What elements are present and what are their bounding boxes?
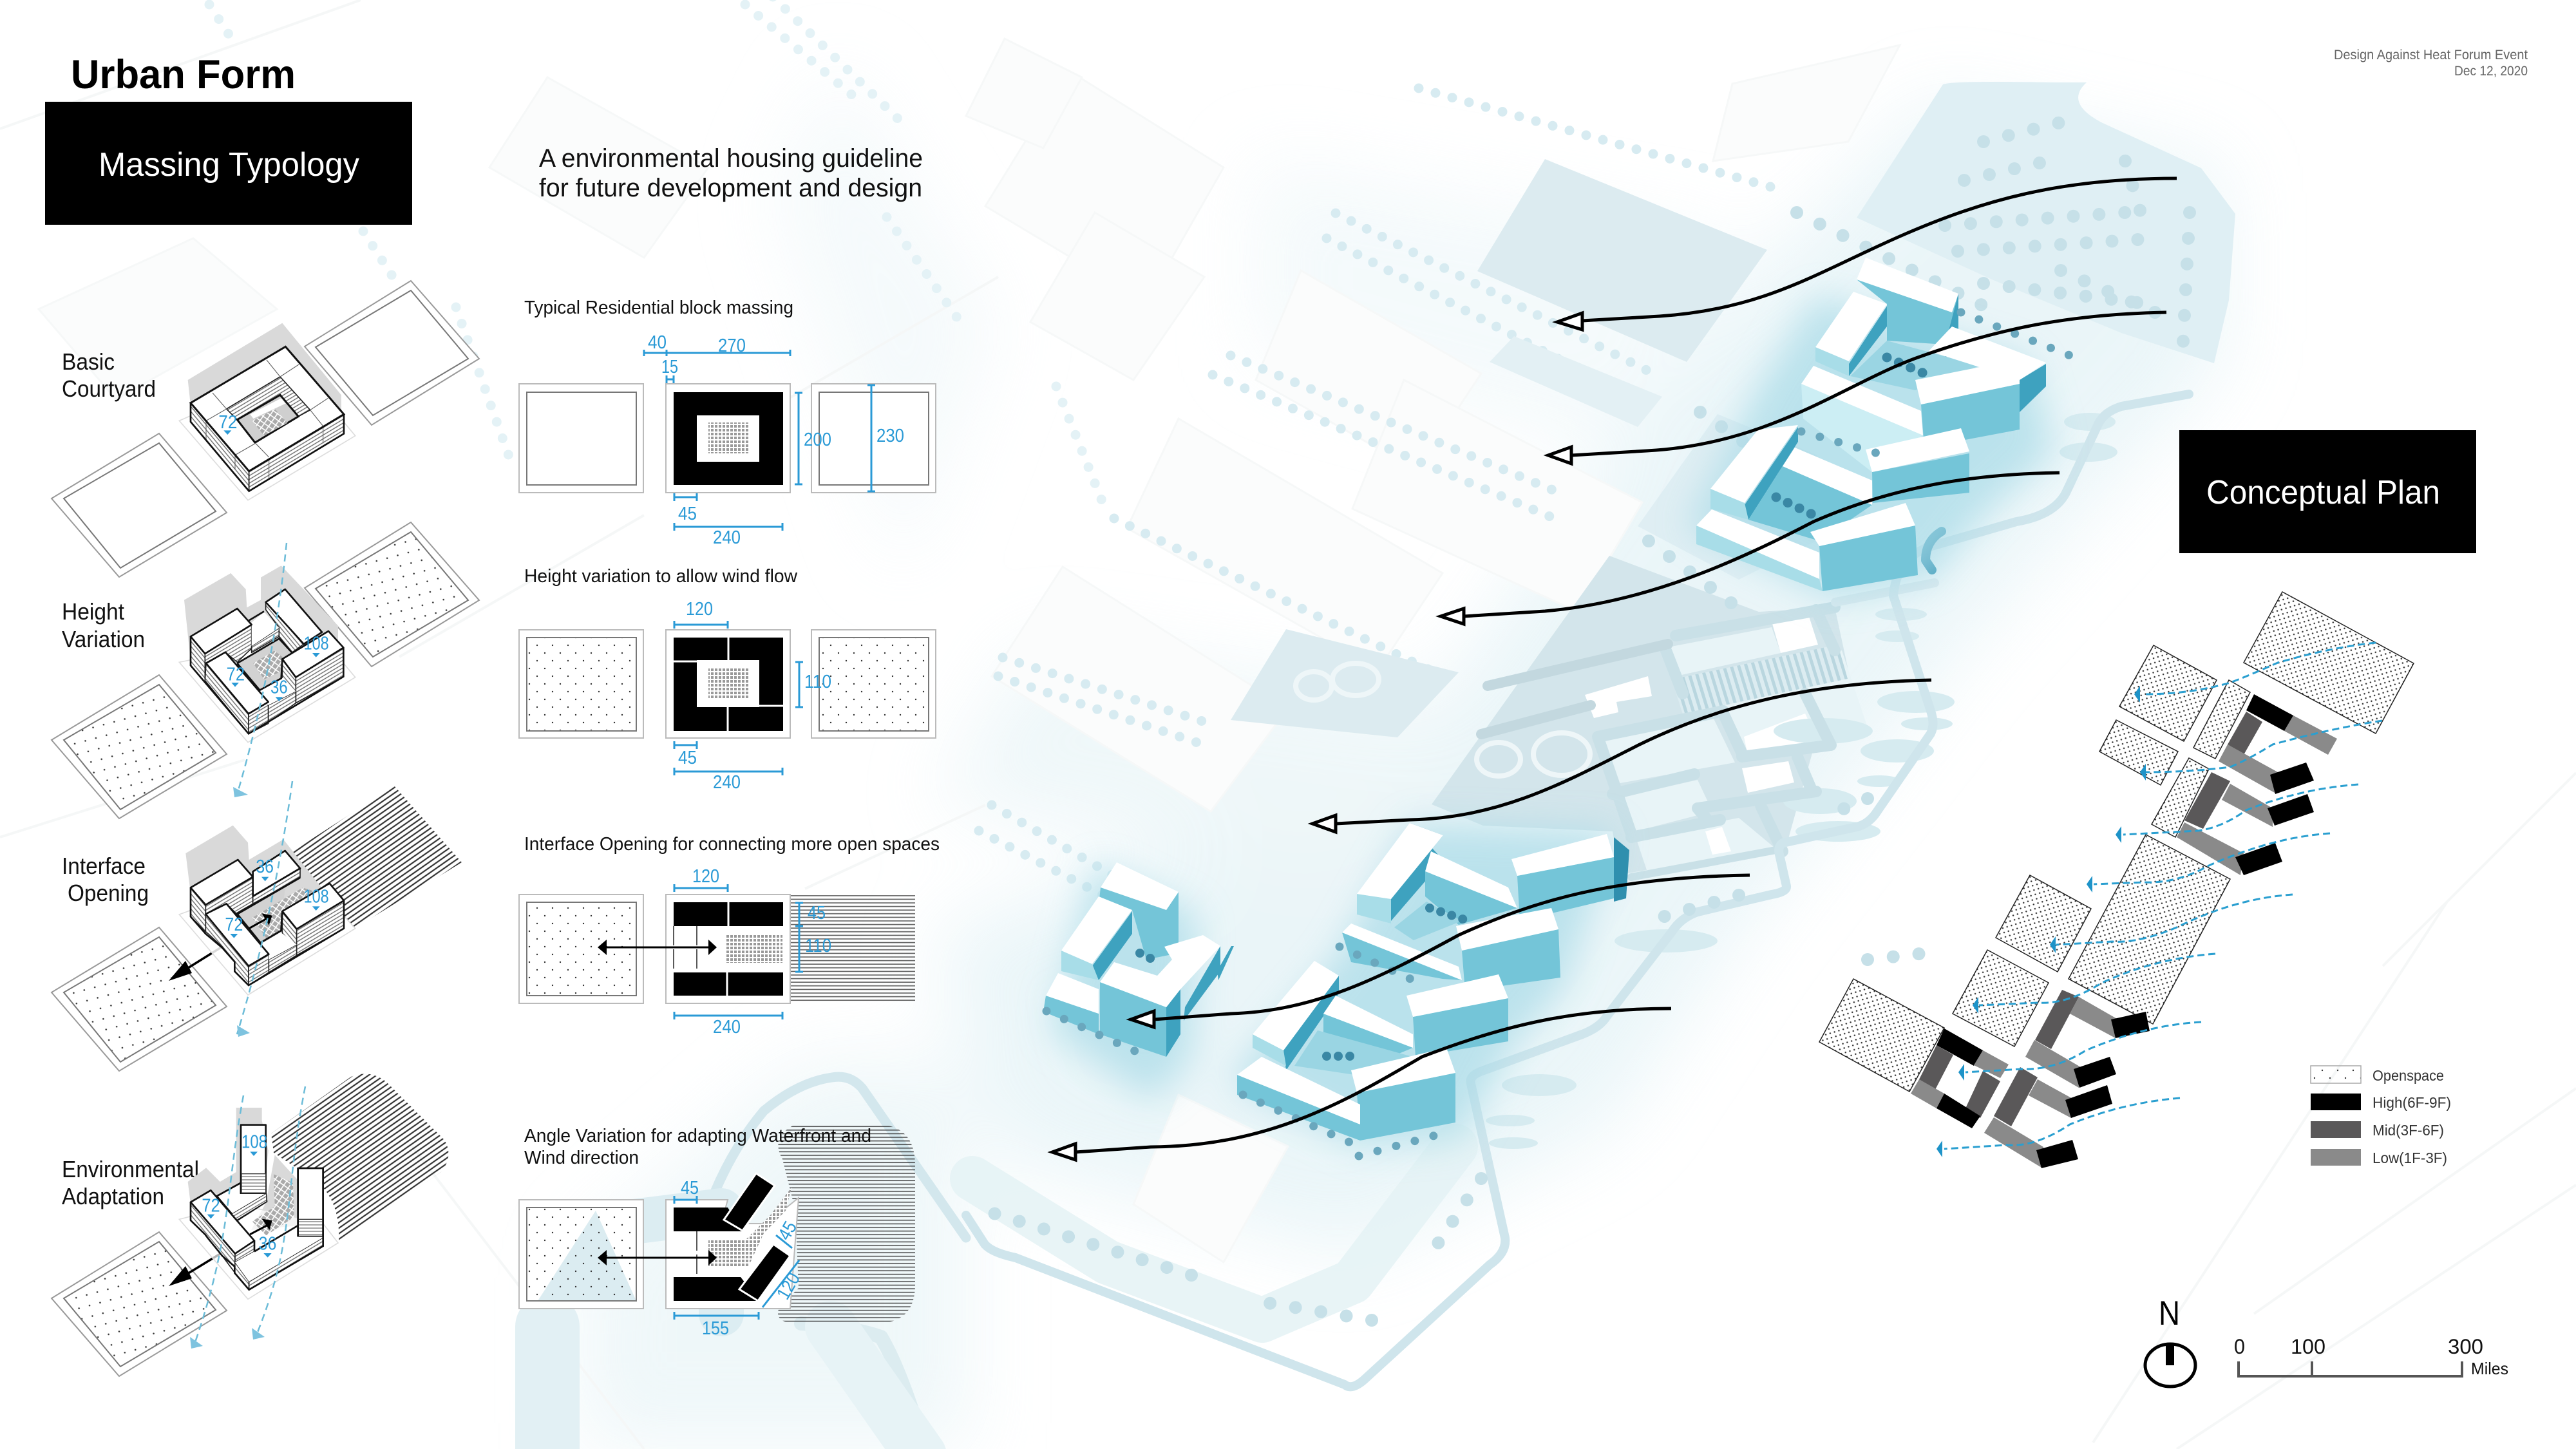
caption: Typical Residential block massing (524, 298, 793, 318)
outline (191, 1168, 323, 1290)
faint blocks (39, 39, 1900, 1262)
conceptual plan diagram (1819, 592, 2414, 1168)
panel: conceptual plan heading (2179, 430, 2476, 553)
dimensions: 45 (681, 1178, 699, 1198)
park: central site (1432, 556, 1850, 875)
map: parks and plazas (547, 82, 2235, 1449)
map: north building cluster (1696, 258, 2085, 591)
dimensions: 45 (808, 903, 826, 923)
dashed wind paths (1937, 643, 2382, 1157)
height labels: 72 (225, 914, 243, 935)
panel: massing typology heading (45, 102, 412, 225)
park: north waterfront (1857, 82, 2235, 363)
block (674, 638, 783, 731)
wind arrow 5 (1131, 875, 1750, 1027)
dimensions: 120 (773, 1269, 804, 1303)
panel: massing typology heading: Massing Typology (99, 146, 359, 184)
lower plot (52, 675, 227, 819)
map: south building clusters (1043, 823, 1629, 1156)
upper plot (305, 281, 479, 425)
water ellipses (1486, 413, 2117, 1149)
height labels (202, 1132, 276, 1258)
panel: conceptual plan heading: Conceptual Plan (2206, 474, 2440, 511)
plan row 2: height variation (519, 566, 936, 793)
height labels: 36 (259, 1234, 276, 1255)
base outline (179, 650, 355, 743)
round plazas (1296, 663, 1590, 776)
scale bar: Miles (2471, 1359, 2508, 1378)
roofs (269, 933, 297, 960)
dimensions (674, 1178, 804, 1339)
block (674, 902, 783, 996)
legend: mid: Mid(3F-6F) (2372, 1122, 2444, 1139)
caption: Wind direction (524, 1148, 639, 1168)
dimensions: 200 (804, 430, 831, 450)
height labels: 72 (227, 665, 245, 685)
walls (191, 403, 249, 491)
court outline (237, 611, 292, 690)
central site white pockets (1585, 614, 1818, 855)
base outline (179, 902, 355, 995)
arrow head in court (250, 1219, 272, 1235)
row 2: height variation (52, 522, 479, 819)
guideline text (539, 144, 923, 202)
park: strip (1490, 336, 1662, 427)
label: basic courtyard: Courtyard (62, 375, 156, 402)
shadow (188, 323, 341, 412)
caption: Interface Opening for connecting more open spaces (524, 834, 940, 855)
plan row 4: angle variation (519, 1124, 915, 1339)
south roofs (1046, 823, 1614, 1124)
title: Urban Form (71, 52, 296, 97)
base outline (179, 1204, 338, 1299)
legend (2311, 1066, 2451, 1166)
block (674, 1173, 791, 1301)
wind line (233, 543, 287, 797)
label: environmental adaptation: Adaptation (62, 1183, 164, 1209)
dimensions: 15 (661, 357, 678, 377)
row 1: basic courtyard (52, 281, 479, 577)
legend: openspace: Openspace (2372, 1067, 2444, 1084)
dimensions: 110 (805, 936, 831, 956)
height labels: 108 (242, 1132, 267, 1153)
wind arrow 4 (1312, 680, 1931, 832)
walls (191, 887, 205, 932)
dimensions: 45 (774, 1218, 801, 1244)
dimensions: 230 (876, 426, 904, 446)
dimensions: 240 (713, 1017, 741, 1037)
lower plot (52, 927, 227, 1071)
dimensions: 45 (678, 504, 697, 524)
wind arrow 2 (1548, 312, 2166, 464)
label: interface opening: Interface (62, 853, 146, 879)
plots (519, 1198, 799, 1309)
scale bar (2234, 1335, 2508, 1378)
base outline (179, 395, 355, 500)
tree rows (209, 0, 1779, 914)
court dots (252, 1174, 294, 1235)
label: height variation (62, 598, 145, 652)
event note (2334, 48, 2528, 79)
dimensions: 120 (692, 866, 719, 887)
lower park band (972, 1146, 1455, 1320)
caption (524, 1126, 871, 1168)
label: height variation: Variation (62, 626, 145, 652)
dimensions: 270 (718, 336, 746, 356)
hatch field (778, 1124, 915, 1323)
roof lines (206, 360, 328, 478)
height labels: 108 (304, 633, 329, 654)
guideline text: for future development and design (539, 174, 922, 202)
legend: openspace (2311, 1066, 2444, 1084)
waterfront route (966, 394, 2189, 1387)
legend: low: Low(1F-3F) (2372, 1150, 2447, 1166)
dimensions: 155 (702, 1318, 729, 1339)
connecting arrow (598, 940, 717, 955)
label: interface opening: Opening (68, 880, 149, 906)
courtyard block (179, 323, 355, 500)
plots (519, 895, 790, 1003)
lower plot (52, 433, 227, 577)
label: interface opening (62, 853, 149, 906)
height labels (227, 633, 329, 701)
park: round plaza (1231, 629, 1459, 737)
wind lines (190, 1086, 305, 1349)
wash: pale blue site glow (580, 64, 2222, 1449)
caption: Height variation to allow wind flow (524, 566, 798, 587)
shadow (184, 565, 338, 661)
site paths (1481, 583, 1935, 877)
shadow (188, 1108, 269, 1204)
varied height block (179, 565, 355, 743)
court floor (237, 886, 285, 943)
height labels: 108 (304, 887, 329, 907)
scale bar: 100 (2291, 1335, 2325, 1358)
lower plot (52, 1232, 227, 1376)
legend: high (2311, 1094, 2451, 1111)
caption: Angle Variation for adapting Waterfront and (524, 1126, 871, 1146)
legend: mid (2311, 1121, 2444, 1139)
block (674, 392, 783, 485)
dimensions (674, 599, 831, 793)
court floor (237, 639, 292, 690)
row 3: interface opening (52, 781, 462, 1071)
park and riverside trees (985, 122, 2190, 1320)
dimensions (674, 866, 831, 1037)
height labels: 72 (202, 1196, 220, 1217)
building bars (1911, 694, 2337, 1168)
wind arrow 3 (1441, 473, 2060, 624)
interface block (179, 826, 355, 995)
legend: low (2311, 1149, 2447, 1166)
height labels (225, 857, 329, 938)
arrow head in court (249, 913, 272, 929)
legend: high: High(6F-9F) (2372, 1094, 2451, 1111)
panel: plan diagrams (519, 298, 940, 1339)
arrow tail (169, 1253, 222, 1286)
plan row 3: interface opening (519, 834, 940, 1037)
south-west greenway (547, 1077, 966, 1449)
park behind north cluster (1638, 414, 1868, 580)
dimensions: 240 (713, 527, 741, 548)
wind arrow 1 (1557, 178, 2177, 330)
wind line (237, 781, 292, 1037)
striped terrace (1672, 645, 1848, 714)
height label 72: 72 (218, 412, 237, 433)
adaptation block (179, 1108, 338, 1299)
dark courtyard and street trees (1046, 908, 1468, 1156)
open space plots (1819, 592, 2414, 1092)
plots (519, 630, 936, 738)
court floor (237, 395, 298, 442)
walls (191, 1202, 235, 1273)
map: teal glow around clusters (1050, 296, 2054, 1146)
inner walls (227, 377, 310, 420)
hatch field (271, 1074, 448, 1242)
connecting arrow (598, 1250, 717, 1265)
dark route segment (1926, 531, 1942, 570)
roofs (217, 1183, 267, 1220)
north arrow: N (2159, 1294, 2180, 1332)
upper plot (305, 522, 479, 667)
row 4: environmental adaptation (52, 1074, 448, 1376)
dimensions: 45 (678, 748, 697, 768)
event note: Dec 12, 2020 (2454, 64, 2528, 79)
label: basic courtyard (62, 348, 156, 402)
roofs (252, 612, 279, 646)
label: height variation: Height (62, 598, 124, 625)
arrow tail (169, 947, 222, 981)
height labels: 36 (270, 677, 288, 698)
outline (191, 346, 344, 471)
label: environmental adaptation: Environmental (62, 1156, 199, 1182)
court outline (237, 878, 300, 943)
park: upper plaza (1477, 159, 1767, 362)
dimensions: 240 (713, 772, 741, 793)
courtyard trees (1776, 312, 2085, 518)
guideline text: A environmental housing guideline (539, 144, 923, 173)
scale bar: 300 (2448, 1335, 2483, 1358)
scale bar: 0 (2234, 1335, 2245, 1358)
cluster roofs (1696, 258, 2046, 579)
dimensions: 110 (804, 672, 831, 692)
wind arrow 6 (1052, 1009, 1671, 1160)
dimensions: 120 (686, 599, 713, 620)
dimensions: 40 (648, 332, 667, 353)
label: environmental adaptation (62, 1156, 199, 1209)
hatch field (290, 786, 462, 929)
north arrow (2145, 1294, 2195, 1387)
plots (519, 384, 936, 493)
panel: axonometric diagrams (52, 281, 479, 1376)
hatch field (791, 895, 915, 1001)
central site lighter areas (1598, 627, 1868, 876)
shadow (185, 826, 324, 914)
label: basic courtyard: Basic (62, 348, 115, 375)
event note: Design Against Heat Forum Event (2334, 48, 2528, 62)
walls (191, 636, 205, 683)
plan row 1: typical block (519, 298, 936, 548)
roof (191, 346, 344, 471)
height labels: 36 (256, 857, 274, 877)
wind arrows over the map (1052, 178, 2177, 1160)
dimensions (644, 332, 904, 548)
